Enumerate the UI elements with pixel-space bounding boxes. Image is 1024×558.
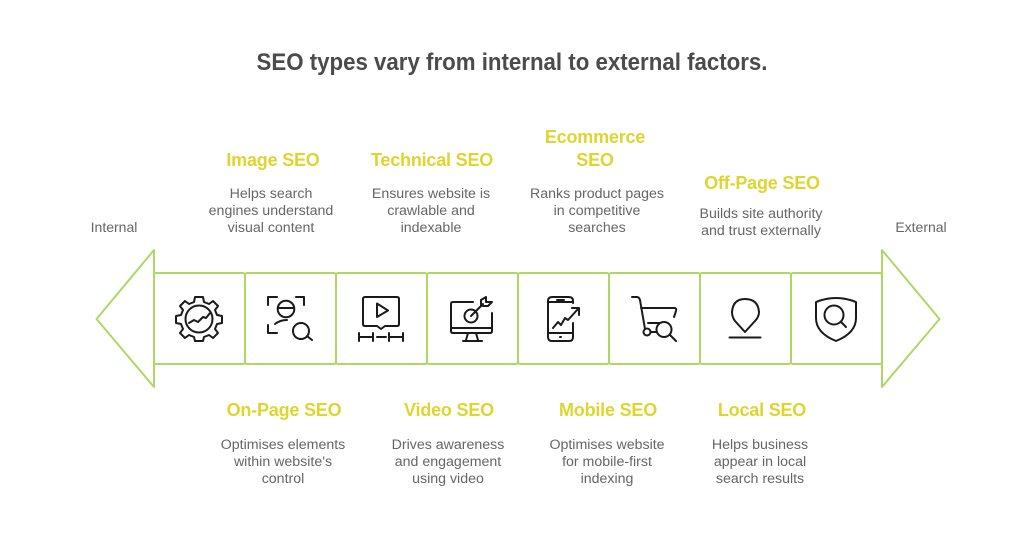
item: On-Page SEO: Optimises elements xyxy=(221,437,345,453)
item: Mobile SEO: Optimises website xyxy=(549,437,665,453)
item: Local SEO: Local SEO xyxy=(718,400,806,420)
item: Ecommerce SEO: SEO xyxy=(576,150,614,170)
item: Video SEO: Drives awareness xyxy=(392,437,504,453)
item: Mobile SEO: for mobile-first xyxy=(562,454,652,470)
icon: phone growth xyxy=(548,297,579,341)
item: On-Page SEO: control xyxy=(262,471,304,487)
item: Image SEO: engines understand xyxy=(209,203,333,219)
item: Video SEO: and engagement xyxy=(395,454,501,470)
icon: image search xyxy=(268,297,312,340)
item: Video SEO: Video SEO xyxy=(404,400,494,420)
item: Technical SEO: Ensures website is xyxy=(372,186,490,202)
item: Ecommerce SEO: searches xyxy=(568,220,626,236)
label: External: External xyxy=(895,219,947,235)
item: Off-Page SEO xyxy=(699,173,823,239)
item: Image SEO: Image SEO xyxy=(226,150,320,170)
item: Mobile SEO: Mobile SEO xyxy=(559,400,657,420)
label: Internal: Internal xyxy=(91,219,137,235)
icon: video play xyxy=(359,297,403,341)
item: Off-Page SEO: Builds site authority xyxy=(699,206,823,222)
arrow: left head xyxy=(96,250,154,387)
item: Mobile SEO: indexing xyxy=(581,471,633,487)
item: Mobile SEO xyxy=(549,400,665,487)
item: Ecommerce SEO: in competitive xyxy=(554,203,640,219)
item: Image SEO xyxy=(209,150,333,236)
item: Technical SEO xyxy=(371,150,493,236)
item: Off-Page SEO: and trust externally xyxy=(701,223,822,239)
icon: monitor target xyxy=(451,297,492,341)
icon: shield search xyxy=(816,298,856,341)
item: Technical SEO: indexable xyxy=(401,220,461,236)
item: Technical SEO: Technical SEO xyxy=(371,150,493,170)
title: SEO types vary from internal to external factors. xyxy=(256,49,768,76)
icon: gear with trend line xyxy=(176,297,222,341)
icon: cart search xyxy=(632,297,676,341)
item: Ecommerce SEO xyxy=(530,127,664,236)
item: Local SEO: search results xyxy=(716,471,804,487)
item: Ecommerce SEO: Ranks product pages xyxy=(530,186,664,202)
item: Technical SEO: crawlable and xyxy=(387,203,475,219)
box row xyxy=(154,273,882,364)
item: Local SEO: Helps business xyxy=(712,437,808,453)
item: On-Page SEO xyxy=(221,400,345,487)
item: Local SEO xyxy=(712,400,808,487)
item: Video SEO: using video xyxy=(412,471,484,487)
item: Image SEO: visual content xyxy=(228,220,314,236)
item: On-Page SEO: within website's xyxy=(233,454,332,470)
item: On-Page SEO: On-Page SEO xyxy=(227,400,342,420)
item: Ecommerce SEO: Ecommerce xyxy=(545,127,645,147)
item: Off-Page SEO: Off-Page SEO xyxy=(704,173,820,193)
item: Local SEO: appear in local xyxy=(714,454,806,470)
arrow: right head xyxy=(882,250,940,387)
item: Image SEO: Helps search xyxy=(230,186,312,202)
item: Video SEO xyxy=(392,400,504,487)
icon: location pin xyxy=(730,299,760,338)
